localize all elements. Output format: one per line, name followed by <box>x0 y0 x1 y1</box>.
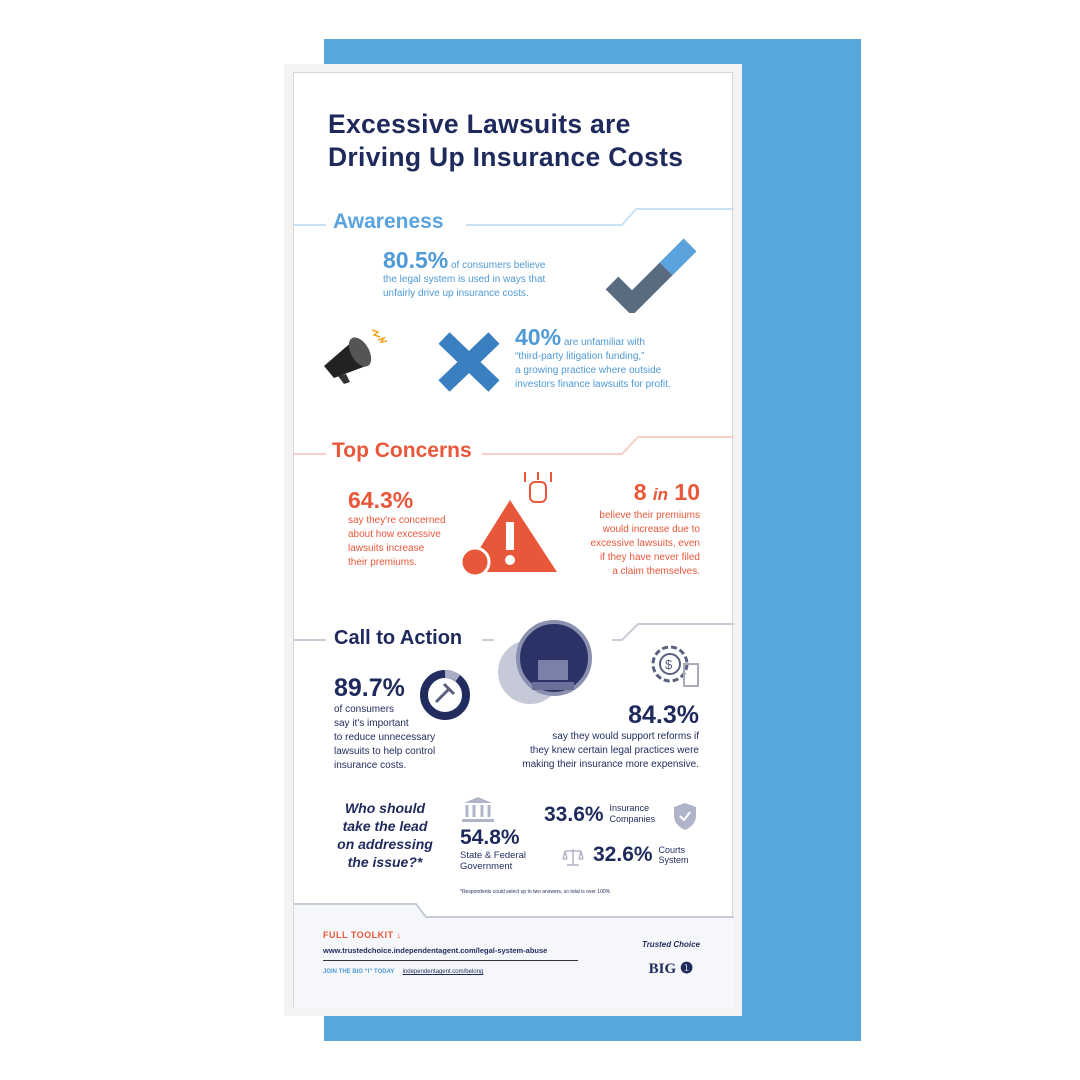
stat: 40%: “third-party litigation funding,” <box>515 351 645 362</box>
stat: 80.5%: the legal system is used in ways that <box>383 274 545 285</box>
icon: warning triangle with money bag <box>462 472 557 574</box>
heading: Top Concerns: Top Concerns <box>332 439 472 462</box>
logos: Trusted Choice <box>642 940 700 949</box>
stat: 89.7%: to reduce unnecessary <box>334 732 435 743</box>
stat: 8 in 10: 8 in 10 <box>634 479 700 505</box>
icon: checkmark <box>606 238 696 313</box>
icon: X mark <box>438 332 500 392</box>
icon: gear with money: $ <box>665 657 673 672</box>
question text: the issue?* <box>348 854 422 870</box>
stat: 32.6% courts <box>593 843 689 866</box>
stat: 8 in 10: a claim themselves. <box>612 566 700 577</box>
stat: 84.3%: making their insurance more expensive. <box>522 759 699 770</box>
stat: 89.7%: of consumers <box>334 704 394 715</box>
stat: 64.3%: 64.3% <box>348 487 413 513</box>
stat: 54.8% government: 54.8% <box>460 826 520 849</box>
stat: 64.3%: their premiums. <box>348 557 417 568</box>
stat: 54.8% government: State & Federal <box>460 850 526 861</box>
icon: government building <box>462 797 494 822</box>
stat: 33.6% insurance companies <box>544 802 655 826</box>
stat: 84.3%: they knew certain legal practices were <box>530 745 699 756</box>
stat: 89.7% <box>334 674 436 771</box>
heading: Awareness: Awareness <box>333 210 444 233</box>
icon: donut chart gavel <box>420 670 470 720</box>
icon: gavel speech bubbles <box>498 620 592 704</box>
stat: 64.3%: lawsuits increase <box>348 543 424 554</box>
question text: take the lead <box>343 818 427 834</box>
stat: 54.8% government: Government <box>460 861 512 872</box>
logos <box>642 940 700 977</box>
stat: 89.7%: insurance costs. <box>334 760 406 771</box>
stat: 89.7%: say it's important <box>334 718 409 729</box>
icon: gear with money <box>652 646 699 687</box>
stat: 40%: 40% are unfamiliar with <box>515 324 645 350</box>
footer: toolkit link <box>323 930 578 975</box>
stat: 32.6% courts: Courts <box>659 845 685 855</box>
stat: 54.8% government <box>460 826 526 872</box>
title: Driving Up Insurance Costs <box>328 142 683 172</box>
title: Excessive Lawsuits are <box>328 109 631 139</box>
title <box>328 109 683 172</box>
section divider lines <box>294 208 734 1007</box>
stat: 80.5%: 80.5% of consumers believe <box>383 247 546 273</box>
stat: 84.3%: 84.3% <box>628 701 699 729</box>
stat: 8 in 10: would increase due to <box>603 524 700 535</box>
infographic page <box>293 72 733 1007</box>
footnote: *Respondents could select up to two answers, so total is over 100% <box>460 889 610 895</box>
stat: 40%: investors finance lawsuits for profit. <box>515 379 671 390</box>
stat: 89.7%: lawsuits to help control <box>334 746 435 757</box>
stat: 84.3% <box>522 701 700 770</box>
stat: 8 in 10 <box>590 479 700 577</box>
question text: on addressing <box>337 836 433 852</box>
stat: 64.3%: about how excessive <box>348 529 441 540</box>
question text <box>337 800 433 870</box>
stat: 84.3%: say they would support reforms if <box>552 731 699 742</box>
heading: Call to Action: Call to Action <box>334 627 462 649</box>
stat: 32.6% courts: System <box>659 855 689 865</box>
stat: 33.6% insurance companies: Companies <box>610 814 655 824</box>
stat: 64.3% <box>348 487 446 568</box>
stat: 8 in 10: if they have never filed <box>600 552 700 563</box>
background blue rectangle <box>324 39 861 1041</box>
stat: 80.5% <box>383 247 546 299</box>
stat: 40%: a growing practice where outside <box>515 365 661 376</box>
question text: Who should <box>345 800 425 816</box>
icon: megaphone <box>324 329 388 384</box>
icon: scales <box>562 849 584 866</box>
stat: 80.5%: unfairly drive up insurance costs. <box>383 288 529 299</box>
icon: shield <box>674 803 696 830</box>
footer: toolkit link: www.trustedchoice.independentagent.com/legal-system-abuse <box>323 946 547 955</box>
stat: 33.6% insurance companies: Insurance <box>610 803 649 813</box>
page frame <box>284 64 742 1016</box>
stat: 8 in 10: excessive lawsuits, even <box>590 538 700 549</box>
footer: toolkit link: FULL TOOLKIT ↓ <box>323 930 402 940</box>
stat: 64.3%: say they're concerned <box>348 515 446 526</box>
stat: 33.6% insurance companies: 33.6% <box>544 802 604 826</box>
logos: BIG ❶ <box>649 961 693 977</box>
stat: 40% <box>515 324 671 390</box>
stat: 8 in 10: believe their premiums <box>599 510 700 521</box>
stat: 32.6% courts: 32.6% <box>593 843 653 866</box>
footer: toolkit link: JOIN THE BIG “I” TODAY independentagent.com/belong <box>323 969 483 975</box>
stat: 89.7%: 89.7% <box>334 674 405 702</box>
